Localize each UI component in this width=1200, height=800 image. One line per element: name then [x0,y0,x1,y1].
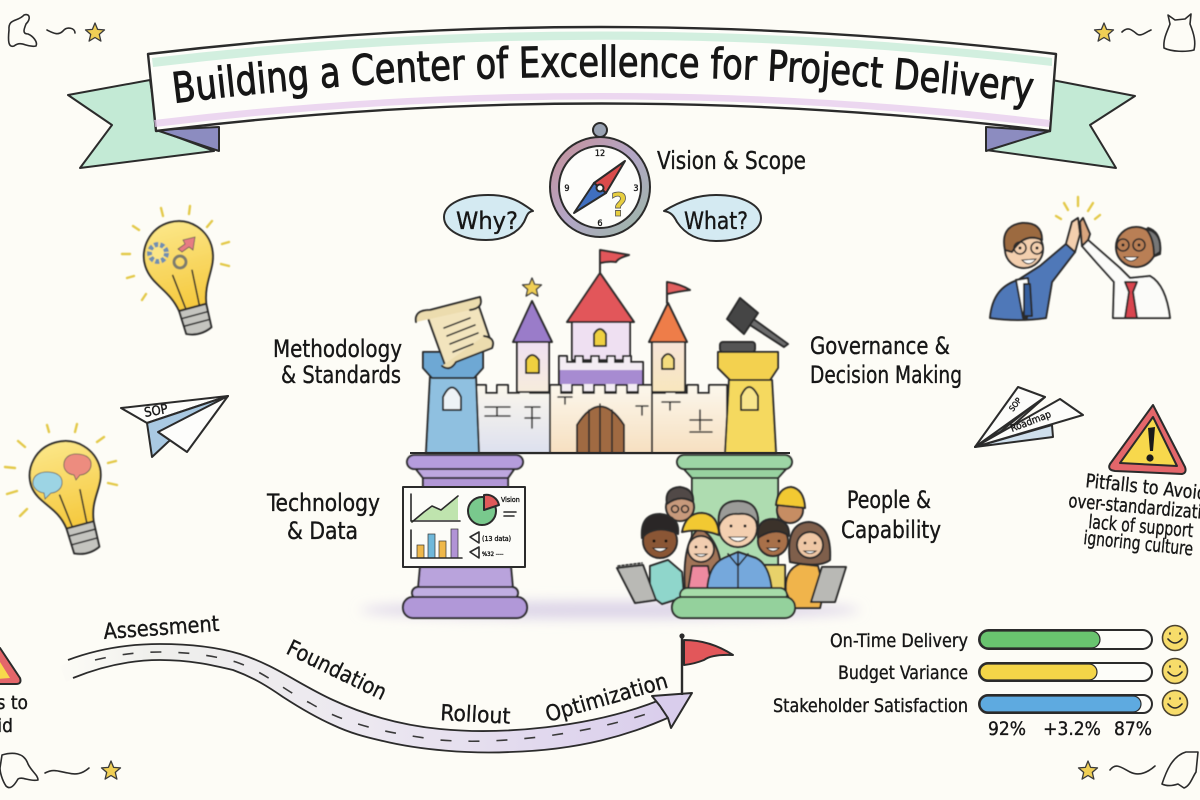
callout: what: What? [684,207,748,235]
decoration: bottom left [0,753,120,788]
right wall [652,385,727,453]
icon: compass: 3 [633,184,639,194]
icon: compass [550,123,650,237]
decoration: bottom right [1078,752,1198,788]
road bottom edge [73,660,672,753]
metric values [988,718,1152,740]
compass face [559,146,641,228]
callout: why [444,195,533,240]
keep battlement [559,356,643,392]
left small tower [517,342,549,392]
icon: smiley 1 [1162,626,1188,650]
roadmap labels [103,612,671,730]
title banner [67,26,1136,169]
roadmap labels: Assessment [103,612,220,645]
center wall [550,385,652,453]
line chart [411,494,460,523]
roadmap road [60,644,692,753]
yellow tower [725,380,776,453]
left hand [1066,218,1080,252]
label: methodology and standards [273,335,402,389]
person: center man [707,501,772,592]
icon: paper plane roadmap: SOP [1007,396,1024,413]
left ribbon tail [68,80,214,168]
callout: why: Why? [456,207,518,235]
keep [572,322,630,360]
metric: stakeholder satisfaction [773,695,1152,717]
person: back glasses [666,487,694,521]
keep roof [567,273,634,322]
banner bottom tint [154,93,1050,127]
blue tower window [443,388,461,410]
decoration: top left [9,15,105,46]
left small tower roof [513,301,552,342]
banner body [148,27,1056,131]
person: right woman [786,522,830,608]
label: people and capability: Capability [841,516,941,544]
left wall [475,385,550,453]
label: governance and decision making [810,332,962,389]
bulb rays [5,424,117,516]
person: right boy [758,519,789,592]
icon: smiley 2 [1162,658,1188,684]
icon: smiley 3 [1162,690,1188,716]
green column base [672,588,795,618]
right man [1082,227,1170,318]
icon: compass: 6 [597,219,603,229]
metric: budget variance [838,662,1152,684]
label: people and capability: People & [847,486,931,514]
icon: idea bulb chat [5,424,120,563]
keep purple band [560,370,642,384]
people group [617,487,846,618]
keep window [594,329,606,346]
data rows: %32 ---- [482,551,504,558]
left man [990,223,1075,320]
right ribbon tail [986,80,1135,168]
metric values: +3.2% [1043,718,1101,740]
icon: paper plane SOP: SOP [143,402,169,421]
brick marks [485,397,712,432]
right small tower [652,342,685,392]
left edge warning fragment [0,648,28,737]
metric: budget variance: Budget Variance [838,662,968,684]
gavel [727,298,788,347]
door [577,406,624,453]
right hand [1080,218,1090,246]
icon: warning triangle [1109,405,1186,474]
platform line [410,452,790,454]
road surface [60,644,672,753]
text block: pitfalls to avoid [1068,470,1200,560]
blue chat bubble [33,472,62,499]
bulb arrow [178,237,195,252]
label: governance and decision making: Governance & [810,332,950,360]
label: governance and decision making: Decision Making [810,361,962,389]
icon: idea bulb gears [122,206,233,343]
label: methodology and standards: & Standards [281,361,401,389]
decoration: top right [1094,14,1195,51]
star on tower [522,278,542,296]
bar chart [411,529,462,558]
right tower flag [667,282,690,303]
question mark: ? [611,186,627,224]
metric: on-time delivery [830,630,1152,652]
metric values: 92% [988,718,1026,740]
bulb gear [150,244,166,262]
compass numerals: 12 [595,149,605,159]
roadmap labels: Optimization [543,669,671,728]
road dashes [95,652,664,741]
scroll [416,297,493,368]
compass knob [593,123,607,137]
green column [677,455,792,595]
roadmap labels: Foundation [282,636,390,706]
bulb rays [122,206,229,300]
compass needle blue [574,183,606,213]
compass pivot [596,184,604,192]
keep flag [600,250,629,273]
road top edge [68,644,660,731]
data rows [470,532,511,558]
road arrowhead [652,693,692,728]
technology dashboard panel [403,487,525,567]
pie chart [468,495,499,525]
heading: vision and scope: Vision & Scope [657,146,806,175]
icon: compass: 9 [564,184,570,194]
metric: on-time delivery: On-Time Delivery [830,630,968,652]
right small tower roof [649,303,687,342]
roadmap labels: Rollout [440,701,511,730]
tablet [811,567,846,602]
right tower window [662,354,674,369]
title text: Building a Center of Excellence for Project Delivery [173,44,1034,110]
metric: stakeholder satisfaction: Stakeholder Satisfaction [773,695,968,717]
castle [416,250,788,453]
compass needle red [594,161,625,193]
compass rim [550,137,650,237]
legend text: Vision [501,496,520,504]
ground shadow [360,601,860,619]
label: people and capability [841,486,941,544]
label: technology and data: Technology [266,489,380,517]
label: technology and data: & Data [287,517,358,545]
label: technology and data [266,489,380,545]
metrics panel [773,626,1188,740]
person: left boy [642,514,684,604]
label: methodology and standards: Methodology [273,335,402,363]
right ribbon fold [986,127,1050,151]
left ribbon fold [156,127,219,151]
callout: what [664,195,761,241]
banner top tint [152,32,1052,67]
flag at road end [679,633,733,695]
blue tower [426,377,479,453]
left tower window [526,355,539,373]
person: back hard hat [776,487,805,523]
icon: high five [990,197,1170,320]
icon: paper plane SOP [121,396,228,457]
purple column [403,455,527,618]
gavel block [720,342,755,352]
notepad [617,563,656,603]
icon: paper plane roadmap [975,387,1083,447]
red chat bubble [64,454,91,480]
icon: paper plane roadmap: Roadmap [1009,409,1053,435]
bulb small gear [174,256,186,268]
sparkle [1056,197,1100,219]
data rows: (13 data) [482,535,511,543]
yellow tower window [741,387,758,410]
person: hard hat woman [682,513,722,590]
metric values: 87% [1114,718,1152,740]
